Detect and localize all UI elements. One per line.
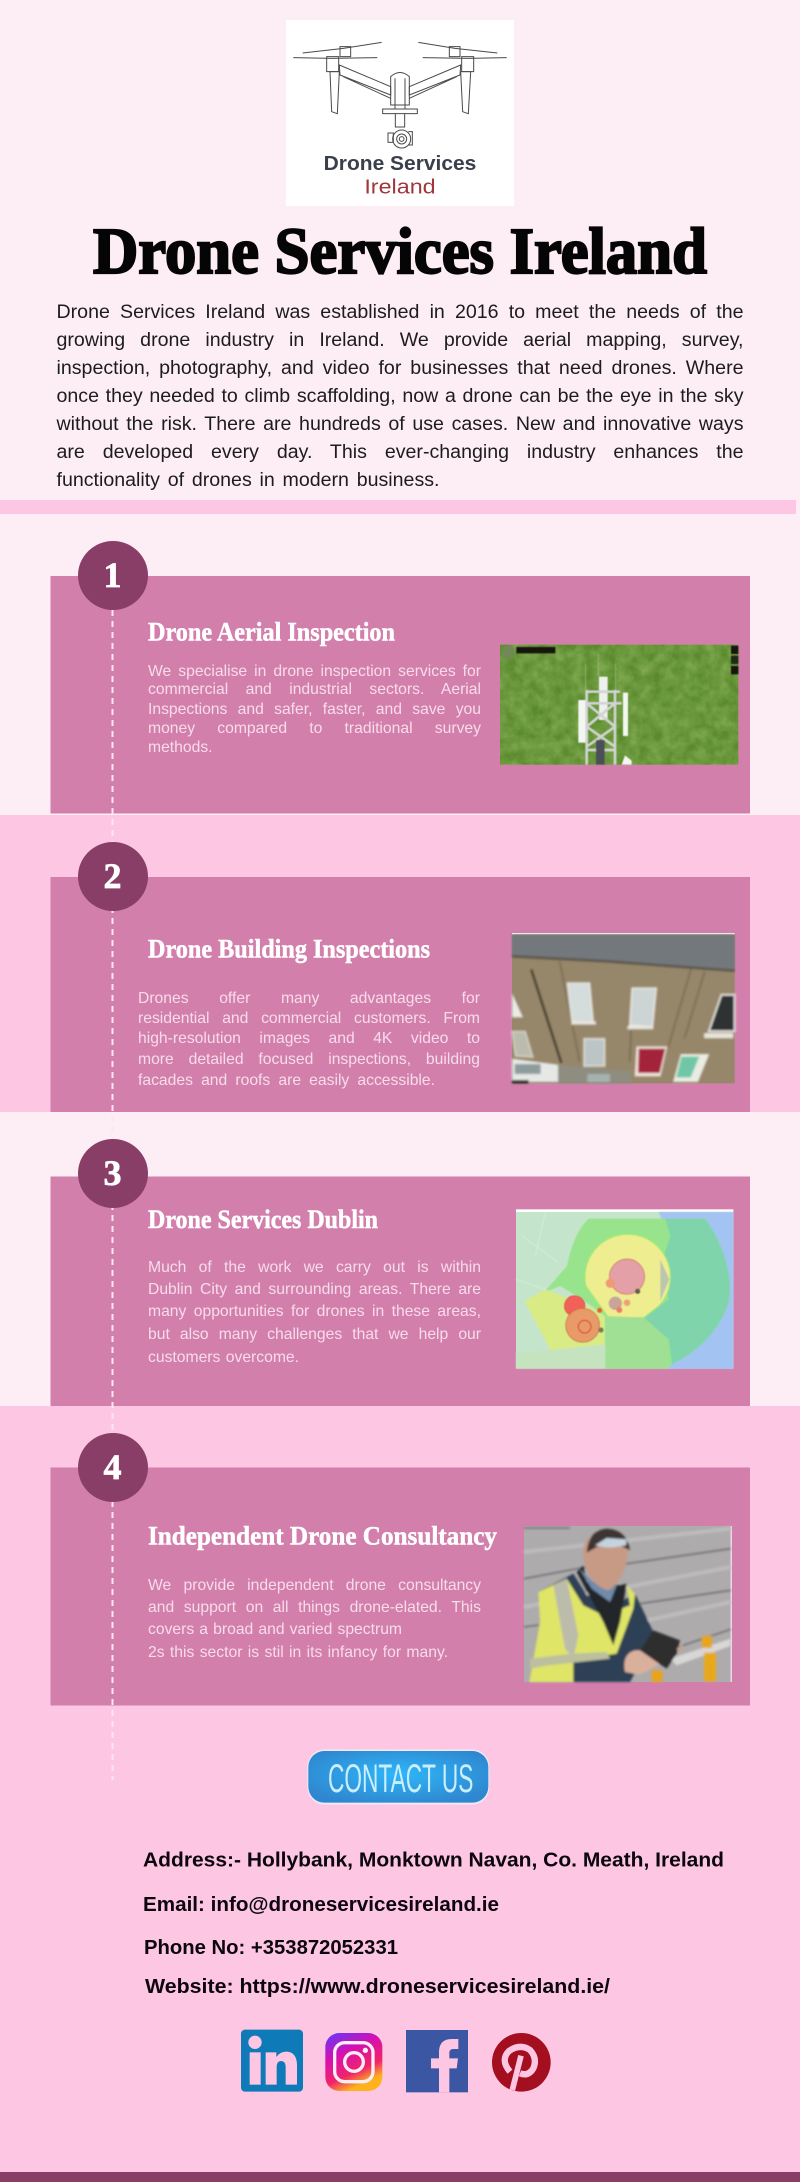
text block: building inspections description: facades and roofs are easily accessible. [138,1072,435,1089]
social media icons [241,2030,551,2092]
map: Dublin drone restriction zones [516,1209,734,1370]
intro text block [56,301,744,491]
intro text block: are developed every day. This ever-changing industry enhances the [56,441,744,463]
intro text block: inspection, photography, and video for businesses that need drones. Where [56,357,744,379]
heading: Independent Drone Consultancy: Independent Drone Consultancy [148,1522,497,1550]
address: Address:- Hollybank, Monktown Navan, Co. Meath, Ireland [143,1848,724,1872]
text block: aerial inspection description: commercial and industrial sectors. Aerial [148,681,481,698]
step 3 badge: 3 [104,1153,122,1193]
icon: facebook [406,2030,468,2092]
icon: linkedin [241,2030,303,2092]
heading: Drone Services Dublin: Drone Services Dublin [148,1205,378,1234]
text block: aerial inspection description: methods. [148,739,213,756]
heading: Drone Building Inspections: Drone Building Inspections [148,934,430,964]
step 4 badge: 4 [104,1447,122,1487]
step 3 badge [78,1139,148,1208]
text block: Dublin description: but also many challenges that we help our [148,1326,481,1343]
intro text block: once they needed to climb scaffolding, now a drone can be the eye in the sky [56,385,744,407]
email: Email: info@droneservicesireland.ie [143,1893,499,1916]
icon: instagram [325,2033,382,2091]
text block: consultancy description: covers a broad and varied spectrum [148,1621,402,1638]
panel: card backgrounds [50,576,750,1706]
text block: building inspections description: residential and commercial customers. From [138,1010,480,1027]
text block: aerial inspection description: We specialise in drone inspection services for [148,663,481,680]
text block: building inspections description: Drones offer many advantages for [138,990,480,1007]
website: Website: https://www.droneservicesireland.ie/ [145,1975,610,1998]
button: contact us: CONTACT US [328,1757,473,1801]
text block: building inspections description: more detailed focused inspections, building [138,1051,480,1068]
step 2 badge: 2 [104,856,122,896]
step 2 badge [78,842,148,911]
intro text block: functionality of drones in modern business. [56,469,440,491]
text block: consultancy description [148,1577,481,1661]
text block: consultancy description: 2s this sector is stil in its infancy for many. [148,1644,448,1661]
photo: consultant holding drone controller [523,1526,732,1684]
logo: Drone Services [324,152,476,175]
text block: Dublin description [148,1259,481,1366]
text block: Dublin description: Dublin City and surrounding areas. There are [148,1281,481,1298]
contact details [143,1848,724,1998]
title: Drone Services Ireland [93,215,707,288]
step 4 badge [78,1433,148,1502]
logo [286,20,514,206]
phone: Phone No: +353872052331 [144,1936,398,1959]
photo: brick building from above [510,933,737,1085]
icon: pinterest [492,2033,551,2092]
intro text block: without the risk. There are hundreds of use cases. New and innovative ways [56,413,744,435]
intro text block: Drone Services Ireland was established in 2016 to meet the needs of the [56,301,744,323]
logo: Ireland [364,175,436,198]
text block: building inspections description: high-resolution images and 4K video to [138,1030,480,1047]
text block: Dublin description: Much of the work we carry out is within [148,1259,481,1276]
step 1 badge: 1 [104,555,122,595]
text block: aerial inspection description: money compared to traditional survey [148,720,481,737]
text block: aerial inspection description: Inspections and safer, faster, and save you [148,701,481,718]
photo: telecom tower on grass [500,644,740,766]
text block: consultancy description: and support on all things drone-elated. This [148,1599,481,1616]
text block: building inspections description [138,990,480,1089]
intro text block: growing drone industry in Ireland. We provide aerial mapping, survey, [56,329,744,351]
heading: Drone Aerial Inspection: Drone Aerial Inspection [148,618,396,646]
text block: Dublin description: many opportunities for drones in these areas, [148,1303,481,1320]
button: contact us [307,1749,490,1805]
timeline dashed line [112,610,114,1780]
step 1 badge [78,541,148,610]
text block: consultancy description: We provide independent drone consultancy [148,1577,481,1594]
text block: Dublin description: customers overcome. [148,1349,299,1366]
text block: aerial inspection description [148,663,481,756]
